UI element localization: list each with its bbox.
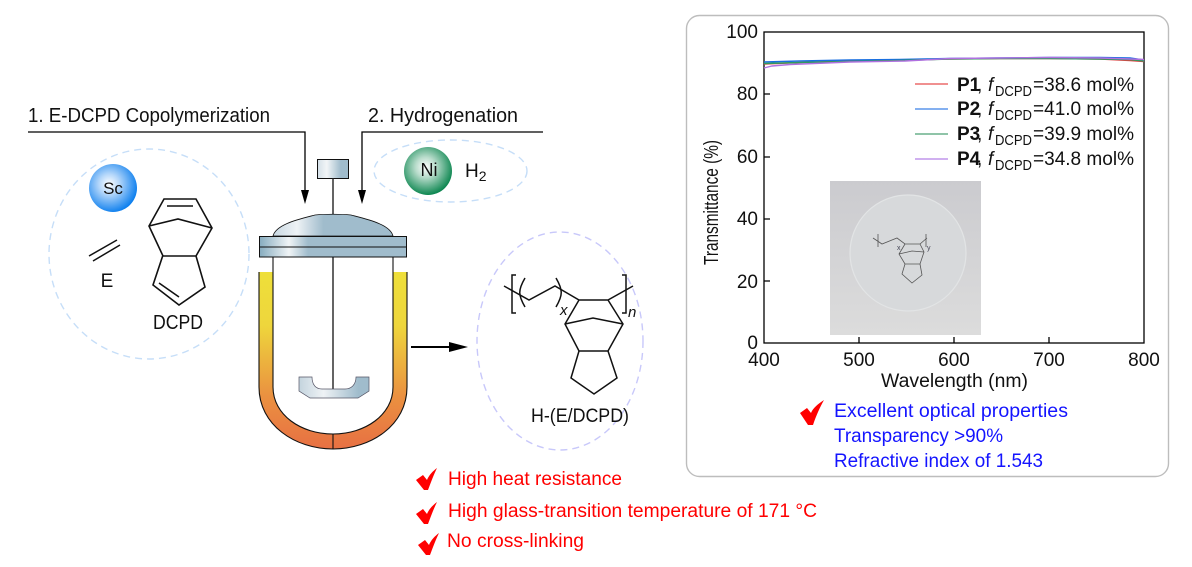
- legend P2: ,: [977, 99, 982, 120]
- product label: H-(E/DCPD): [531, 406, 629, 427]
- y axis labels: 60: [737, 147, 758, 168]
- legend P3: DCPD: [995, 132, 1032, 149]
- legend P4: f: [988, 149, 995, 170]
- legend P2: f: [988, 99, 995, 120]
- plot frame and ticks: [764, 32, 1144, 343]
- legend P3: P3: [957, 124, 980, 145]
- legend P4: ,: [977, 149, 982, 170]
- legend: [915, 75, 1134, 174]
- checklist: thermal properties: [416, 468, 817, 555]
- legend P1: [915, 75, 1134, 100]
- arrow: reactor to product: [411, 342, 468, 352]
- y axis title: Transmittance (%): [701, 140, 723, 265]
- panel: Ni catalyst and hydrogen: [374, 140, 527, 202]
- y axis labels: 20: [737, 272, 758, 293]
- checklist: thermal properties: High heat resistance: [448, 469, 622, 490]
- heating jacket: [259, 272, 407, 449]
- legend P2: =41.0 mol%: [1033, 99, 1134, 120]
- x axis labels: 500: [843, 350, 875, 371]
- subscript x: x: [559, 302, 568, 319]
- hydrogen label: H: [465, 161, 479, 182]
- legend P3: =39.9 mol%: [1033, 124, 1134, 145]
- legend P1: DCPD: [995, 83, 1032, 100]
- legend P1: P1: [957, 75, 981, 96]
- flange: [259, 236, 407, 257]
- x axis labels: 800: [1128, 350, 1160, 371]
- DCPD structure: DCPD: [153, 312, 203, 334]
- legend P3: ,: [977, 124, 982, 145]
- panel: transmittance chart: [686, 16, 1168, 476]
- polymer structure: [504, 275, 633, 394]
- photo inset of film: y: [927, 245, 931, 252]
- y axis labels: [726, 22, 758, 354]
- impeller: [299, 377, 369, 398]
- checklist: optical properties: Refractive index of 1.543: [834, 451, 1043, 472]
- stirrer shaft: [332, 178, 334, 389]
- x axis labels: [748, 350, 1160, 371]
- photo inset of film: x: [897, 245, 901, 252]
- icon: Sc catalyst: [89, 164, 137, 212]
- legend P1: ,: [977, 75, 982, 96]
- heading: step 1 copolymerization: [28, 105, 309, 204]
- legend P3: [915, 124, 1134, 149]
- legend P3: f: [988, 124, 995, 145]
- legend P2: P2: [957, 99, 980, 120]
- panel: monomers and Sc catalyst: [49, 149, 249, 359]
- checklist: optical properties: [800, 400, 1068, 472]
- checklist: optical properties: Transparency >90%: [834, 426, 1003, 447]
- reactor vessel: [259, 160, 407, 449]
- ethylene structure: [89, 240, 120, 292]
- heading: step 1 copolymerization: 1. E-DCPD Copolymerization: [28, 105, 270, 127]
- lid: [273, 214, 393, 236]
- ethylene structure: E: [101, 271, 113, 292]
- legend P2: DCPD: [995, 107, 1032, 124]
- x axis title: Wavelength (nm): [881, 371, 1028, 392]
- y axis labels: 100: [726, 22, 758, 43]
- hydrogen label: 2: [479, 168, 487, 184]
- legend P4: DCPD: [995, 157, 1032, 174]
- x axis labels: 400: [748, 350, 780, 371]
- x axis labels: 700: [1033, 350, 1065, 371]
- checklist: thermal properties: High glass-transition temperature of 171 °C: [448, 501, 817, 522]
- icon: Ni catalyst: [404, 147, 452, 195]
- checklist: thermal properties: No cross-linking: [447, 531, 584, 552]
- heading: step 2 hydrogenation: [358, 105, 543, 204]
- photo inset of film: [830, 181, 981, 335]
- transmittance curves: [764, 58, 1144, 68]
- icon: Sc catalyst: Sc: [103, 179, 123, 198]
- subscript n: n: [628, 304, 636, 321]
- y axis labels: 0: [747, 333, 758, 354]
- legend P4: P4: [957, 149, 981, 170]
- legend P1: =38.6 mol%: [1033, 75, 1134, 96]
- heading: step 2 hydrogenation: 2. Hydrogenation: [368, 105, 518, 127]
- y axis labels: 40: [737, 209, 758, 230]
- checklist: optical properties: Excellent optical properties: [834, 401, 1068, 422]
- legend P1: f: [988, 75, 995, 96]
- y axis labels: 80: [737, 84, 758, 105]
- legend P4: [915, 149, 1134, 174]
- x axis labels: 600: [938, 350, 970, 371]
- DCPD structure: [149, 199, 212, 334]
- motor: [318, 160, 348, 178]
- panel: product H-(E/DCPD): [477, 232, 643, 450]
- legend P4: =34.8 mol%: [1033, 149, 1134, 170]
- legend P2: [915, 99, 1134, 124]
- icon: Ni catalyst: Ni: [420, 160, 438, 180]
